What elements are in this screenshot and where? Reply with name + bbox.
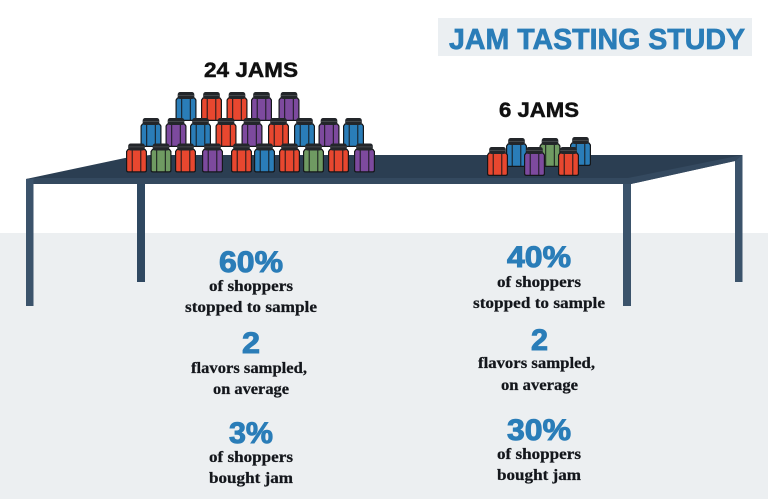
stat: 40% stopped: 40%: [507, 241, 571, 274]
table front edge: [26, 155, 742, 184]
stat: 2 flavors: flavors sampled,: [191, 360, 307, 377]
jar group: 6 jams: [488, 137, 590, 175]
heading: 6 jams: 6 JAMS: [499, 99, 579, 122]
title banner: JAM TASTING STUDY: [449, 24, 745, 56]
heading: 24 jams: 24 JAMS: [204, 59, 298, 82]
stat: 40% stopped: of shoppers: [497, 274, 581, 291]
stats: 24 jams column: [185, 246, 317, 487]
jar pyramid: 24 jams: [127, 92, 374, 172]
stat: 30% bought: of shoppers: [497, 446, 581, 463]
stat: 2 flavors: 2: [242, 327, 260, 360]
stat: 30% bought: [497, 414, 581, 484]
stat: 2 flavors: 2: [531, 324, 548, 357]
stat: 2 flavors: [478, 324, 595, 394]
stat: 3% bought: bought jam: [209, 470, 293, 487]
stat: 40% stopped: [473, 241, 605, 312]
stat: 60% stopped: 60%: [219, 246, 283, 279]
stat: 2 flavors: flavors sampled,: [478, 355, 595, 372]
stat: 60% stopped: of shoppers: [209, 278, 293, 295]
stat: 60% stopped: [185, 246, 317, 316]
stat: 2 flavors: on average: [213, 381, 289, 398]
stat: 3% bought: of shoppers: [209, 449, 293, 466]
stats: 6 jams column: [473, 241, 605, 484]
table top: [26, 155, 742, 184]
stat: 2 flavors: on average: [501, 377, 578, 394]
table: [26, 155, 742, 306]
back left leg: [137, 184, 145, 282]
back right leg: [735, 155, 742, 282]
stat: 40% stopped: stopped to sample: [473, 295, 605, 312]
stat: 60% stopped: stopped to sample: [185, 299, 317, 316]
stat: 30% bought: bought jam: [497, 467, 581, 484]
stat: 3% bought: 3%: [229, 417, 273, 450]
front right leg: [623, 184, 631, 306]
stat: 2 flavors: [191, 327, 307, 398]
front left leg: [26, 179, 34, 306]
grey floor background: [0, 233, 768, 499]
stat: 30% bought: 30%: [507, 414, 571, 447]
stat: 3% bought: [209, 417, 293, 487]
